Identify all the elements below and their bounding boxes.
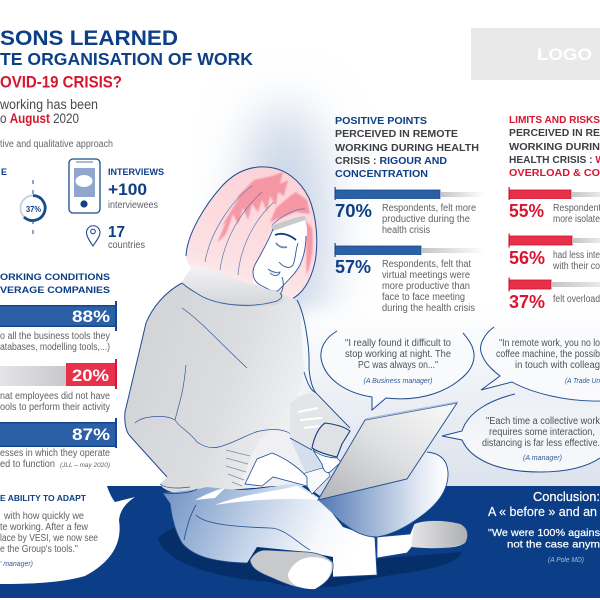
text: businesses: (JLL – may 2020) <box>60 463 110 469</box>
jeans leg <box>163 483 377 577</box>
conclusion <box>488 489 600 564</box>
bar: 56% <box>508 234 600 268</box>
bar: 88%: 88% <box>72 307 110 326</box>
hand left <box>245 453 307 486</box>
foot right <box>377 521 467 558</box>
quote: business manager: PC was always on..." <box>358 360 438 371</box>
hem ribbing <box>226 450 250 486</box>
interviews figures: +100 <box>108 180 147 199</box>
callout: ability to adapt: te working. After a few <box>0 522 89 533</box>
sock left <box>288 557 331 589</box>
bar: 37%: 37% <box>509 292 545 312</box>
text: 56% <box>552 250 600 272</box>
leg right outline <box>343 452 448 537</box>
text: business tools: atabases, modelling tools,...) <box>0 342 110 353</box>
text: 55% <box>553 203 600 225</box>
heading <box>0 272 110 296</box>
bar: 70% <box>334 187 484 221</box>
heading: WORKING DURIN <box>509 141 600 153</box>
logo placeholder: LOGO <box>537 45 592 64</box>
floor band <box>0 486 600 598</box>
face outline <box>253 229 306 296</box>
conclusion: (A Pole MD) <box>548 557 584 564</box>
interviews figures <box>108 167 164 211</box>
text: 70%: health crisis <box>382 225 430 236</box>
icon: map pin <box>86 226 100 246</box>
conclusion: Conclusion: <box>533 489 600 504</box>
leg right <box>318 452 448 537</box>
hair outline <box>186 167 317 300</box>
interviews figures: INTERVIEWS <box>108 167 164 177</box>
panel: positive points <box>334 115 484 314</box>
keyboard <box>302 467 330 494</box>
heading: VERAGE COMPANIES <box>0 285 110 296</box>
bar: 55% <box>508 187 600 221</box>
right sleeve <box>290 393 350 448</box>
sweater folds <box>135 308 291 488</box>
countries figure <box>108 224 145 251</box>
quote: business manager: stop working at night. The <box>345 349 451 360</box>
heading: ORKING CONDITIONS <box>0 272 110 283</box>
face <box>253 220 307 292</box>
mouth <box>268 269 280 276</box>
bar: 20%: 20% <box>72 366 109 385</box>
hair strands <box>205 186 305 275</box>
panel: limits and risks <box>508 114 600 312</box>
eyebrow <box>275 234 296 240</box>
heading <box>509 114 600 179</box>
bar: 57%: 57% <box>335 257 371 277</box>
text: 70%: Respondents, felt more <box>382 203 476 214</box>
heading: CONCENTRATION <box>335 168 428 180</box>
bar: 56%: 56% <box>509 248 545 268</box>
bar: 37% <box>508 278 600 312</box>
foot right sock <box>411 521 467 548</box>
title block: OVID-19 CRISIS? <box>0 72 122 92</box>
quote: business manager: (A Business manager) <box>364 378 432 385</box>
cuff <box>312 423 350 457</box>
bar: 87%: 87% <box>72 425 110 444</box>
text: employees <box>0 391 110 413</box>
interviews figures: interviewees <box>108 200 158 211</box>
text: 57%: Respondents, felt that <box>382 259 471 270</box>
text: 70% <box>382 203 476 236</box>
title block: TE ORGANISATION OF WORK <box>0 49 253 69</box>
callout: ability to adapt: ' manager) <box>0 561 33 568</box>
questionnaire gauge: 37% <box>26 204 41 214</box>
icon: phone <box>69 159 100 213</box>
conclusion: "We were 100% agains <box>488 527 600 539</box>
conclusion: not the case anym <box>507 538 600 550</box>
method note: tive and qualitative approach <box>0 139 113 150</box>
sweater outline <box>125 283 316 477</box>
title block <box>0 27 253 92</box>
text: 57%: during the health crisis <box>382 303 475 314</box>
questionnaire gauge: E <box>1 167 7 177</box>
sleeve outline <box>290 372 350 450</box>
callout: ability to adapt: E ABILITY TO ADAPT <box>0 493 87 503</box>
quote: trade union <box>481 327 600 401</box>
eye <box>276 243 287 247</box>
foot left <box>250 550 333 588</box>
bar: 20% <box>0 359 117 389</box>
floor shadow <box>158 525 462 588</box>
subtitle <box>0 97 98 126</box>
subtitle: working has been <box>0 97 98 112</box>
title block: SONS LEARNED <box>0 27 178 50</box>
heading: POSITIVE POINTS <box>335 115 427 127</box>
conclusion: A « before » and an <box>488 505 597 519</box>
countries figure: countries <box>108 240 145 251</box>
hair highlights <box>217 172 313 275</box>
sleeve folds <box>298 408 322 428</box>
text: businesses: ed to function <box>0 459 55 470</box>
bar: 87% <box>0 418 117 448</box>
text: business tools <box>0 331 110 353</box>
sweater lower light <box>238 427 300 488</box>
fringe shadow <box>271 216 306 234</box>
text: business tools: o all the business tools they <box>0 331 110 342</box>
bar: 88% <box>0 301 117 331</box>
quote: manager: (A manager) <box>523 455 562 462</box>
quote: manager <box>442 394 600 472</box>
callout: ability to adapt: e the Group's tools." <box>0 544 78 555</box>
subtitle: o August 2020 <box>0 111 79 126</box>
gap behind arm <box>290 438 352 496</box>
text: 57% <box>382 259 475 314</box>
text: 70%: productive during the <box>382 214 470 225</box>
text: 57%: more productive than <box>382 281 470 292</box>
panel: working conditions <box>0 272 117 470</box>
sweater <box>125 283 307 494</box>
heading: PERCEIVED IN RE <box>509 127 600 139</box>
bar: 57% <box>334 243 484 277</box>
jeans outline <box>163 489 377 577</box>
hair back <box>186 167 317 301</box>
text: businesses <box>0 448 110 470</box>
bar: 55%: 55% <box>509 201 544 221</box>
laptop edge <box>366 402 458 419</box>
heading: PERCEIVED IN REMOTE <box>335 128 458 140</box>
bar: 70%: 70% <box>335 201 372 221</box>
text: 57%: face to face meeting <box>382 292 465 303</box>
text: employees: nat employees did not have <box>0 391 110 402</box>
heading <box>335 115 479 180</box>
illustration: seated woman with laptop <box>125 167 467 589</box>
collar <box>182 265 284 307</box>
questionnaire gauge <box>1 167 47 236</box>
heading: WORKING DURING HEALTH <box>335 142 479 154</box>
callout: ability to adapt: with how quickly we <box>3 511 84 522</box>
callout: ability to adapt <box>0 480 135 584</box>
laptop <box>318 403 457 500</box>
logo placeholder <box>471 28 600 80</box>
nose <box>279 243 298 267</box>
quote: business manager <box>321 323 474 410</box>
text: 57%: virtual meetings were <box>382 270 470 281</box>
heading: CRISIS : RIGOUR AND <box>335 155 447 167</box>
countries figure: 17 <box>108 224 125 241</box>
knee highlights <box>195 486 320 505</box>
text: businesses: esses in which they operate <box>0 448 110 459</box>
callout: ability to adapt: lace by VESI, we now see <box>0 533 98 544</box>
heading: OVERLOAD & CO <box>509 167 600 179</box>
quote: business manager: "I really found it difficult to <box>345 338 451 349</box>
text: employees: ools to perform their activity <box>0 402 110 413</box>
collar line <box>182 283 282 305</box>
hand right <box>313 450 341 473</box>
